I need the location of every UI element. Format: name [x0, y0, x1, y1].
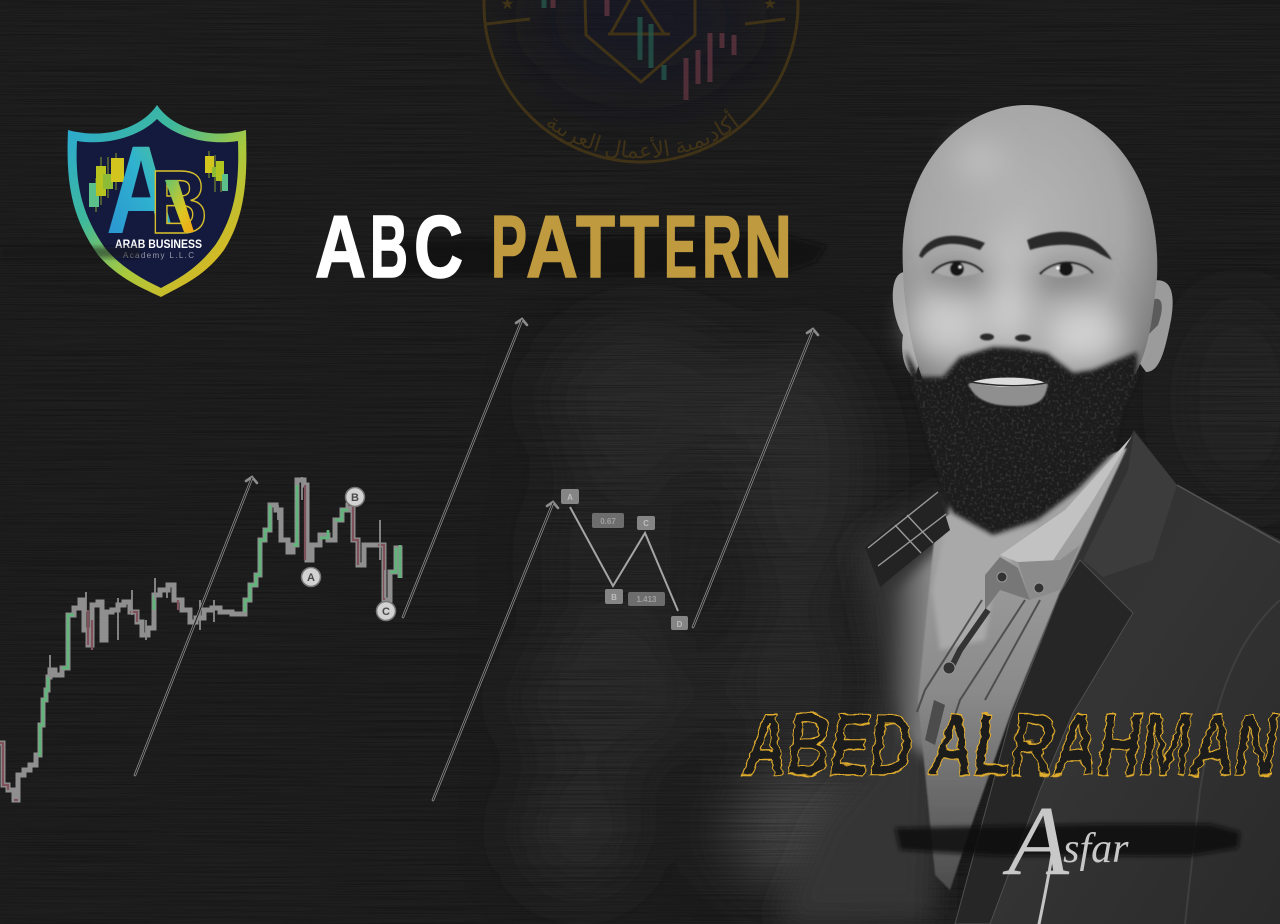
logo monogram: A — [106, 121, 176, 260]
arrow 4 — [693, 329, 818, 627]
point C — [637, 516, 655, 530]
arrow 2 — [403, 319, 527, 617]
logo wordmark: ARAB BUSINESS — [115, 237, 202, 251]
face highlights — [909, 140, 1123, 365]
harmonic pattern diagram — [561, 489, 688, 630]
ratio 1.413 — [628, 592, 665, 606]
title: PATTERN: E — [664, 197, 697, 296]
shirt placket — [917, 600, 1040, 745]
jacket — [955, 430, 1280, 924]
chart labels — [302, 488, 396, 620]
point B — [605, 589, 623, 604]
signature text: A — [1002, 785, 1070, 896]
title: PATTERN: N — [744, 197, 792, 296]
signature text: sfar — [1063, 826, 1129, 872]
beard — [905, 347, 1137, 535]
ratio 1.413: 1.413 — [636, 595, 657, 604]
arrow 3 — [433, 502, 558, 800]
left arm fading into smoke — [775, 490, 950, 924]
label A: A — [307, 572, 315, 584]
panel: logo — [68, 105, 246, 297]
point A: A — [567, 493, 573, 502]
title: ABC: C — [414, 197, 463, 296]
left ear — [893, 272, 925, 378]
ratio 0.67: 0.67 — [600, 517, 616, 526]
right ear — [1130, 280, 1173, 372]
plaid collar — [865, 488, 950, 587]
title: PATTERN: P — [491, 197, 527, 296]
arrow 1 — [135, 477, 257, 775]
shirt buttons — [997, 572, 1007, 582]
logo candles — [89, 151, 228, 212]
head — [903, 105, 1157, 430]
jacket lapel lower — [955, 560, 1133, 924]
chart line — [0, 480, 400, 800]
signature tail — [1039, 842, 1054, 924]
watermark: seal lettering: أكاديمية الأعمال العربية — [547, 108, 738, 158]
neck — [932, 505, 1040, 650]
smoke texture — [515, 290, 1280, 890]
brush stroke behind signature — [895, 824, 1240, 856]
price chart — [0, 477, 400, 800]
title: PATTERN: T — [620, 197, 659, 296]
eyebrows — [919, 232, 1112, 260]
point B: B — [611, 593, 617, 602]
title: PATTERN: A — [526, 197, 578, 296]
title: ABC: B — [370, 197, 408, 296]
shirt collar — [1000, 436, 1132, 565]
point D: D — [677, 620, 683, 629]
title: ABC: A — [315, 197, 366, 296]
label C: C — [382, 606, 390, 618]
portrait — [775, 105, 1280, 924]
name: ABED: ABED — [743, 695, 912, 794]
point D — [671, 616, 688, 630]
nose — [980, 334, 1031, 342]
panel: logo: B — [150, 153, 208, 253]
title: PATTERN: R — [702, 197, 742, 296]
jacket lapel upper — [1083, 432, 1177, 577]
shirt — [885, 436, 1132, 890]
watermark: faded academy seal — [482, 0, 800, 164]
title — [315, 197, 792, 296]
title: PATTERN: T — [576, 197, 615, 296]
point A — [561, 489, 579, 504]
point C: C — [643, 519, 649, 528]
pattern line — [570, 507, 678, 611]
label B: B — [351, 492, 359, 504]
panel: logo: Academy L.L.C — [123, 251, 194, 260]
presenter name — [743, 695, 1280, 794]
ratio 0.67 — [592, 513, 624, 528]
mouth — [966, 378, 1050, 406]
signature — [1002, 785, 1129, 924]
logo shield — [68, 105, 246, 297]
eyes — [932, 262, 1093, 277]
title brush stroke — [0, 234, 826, 276]
